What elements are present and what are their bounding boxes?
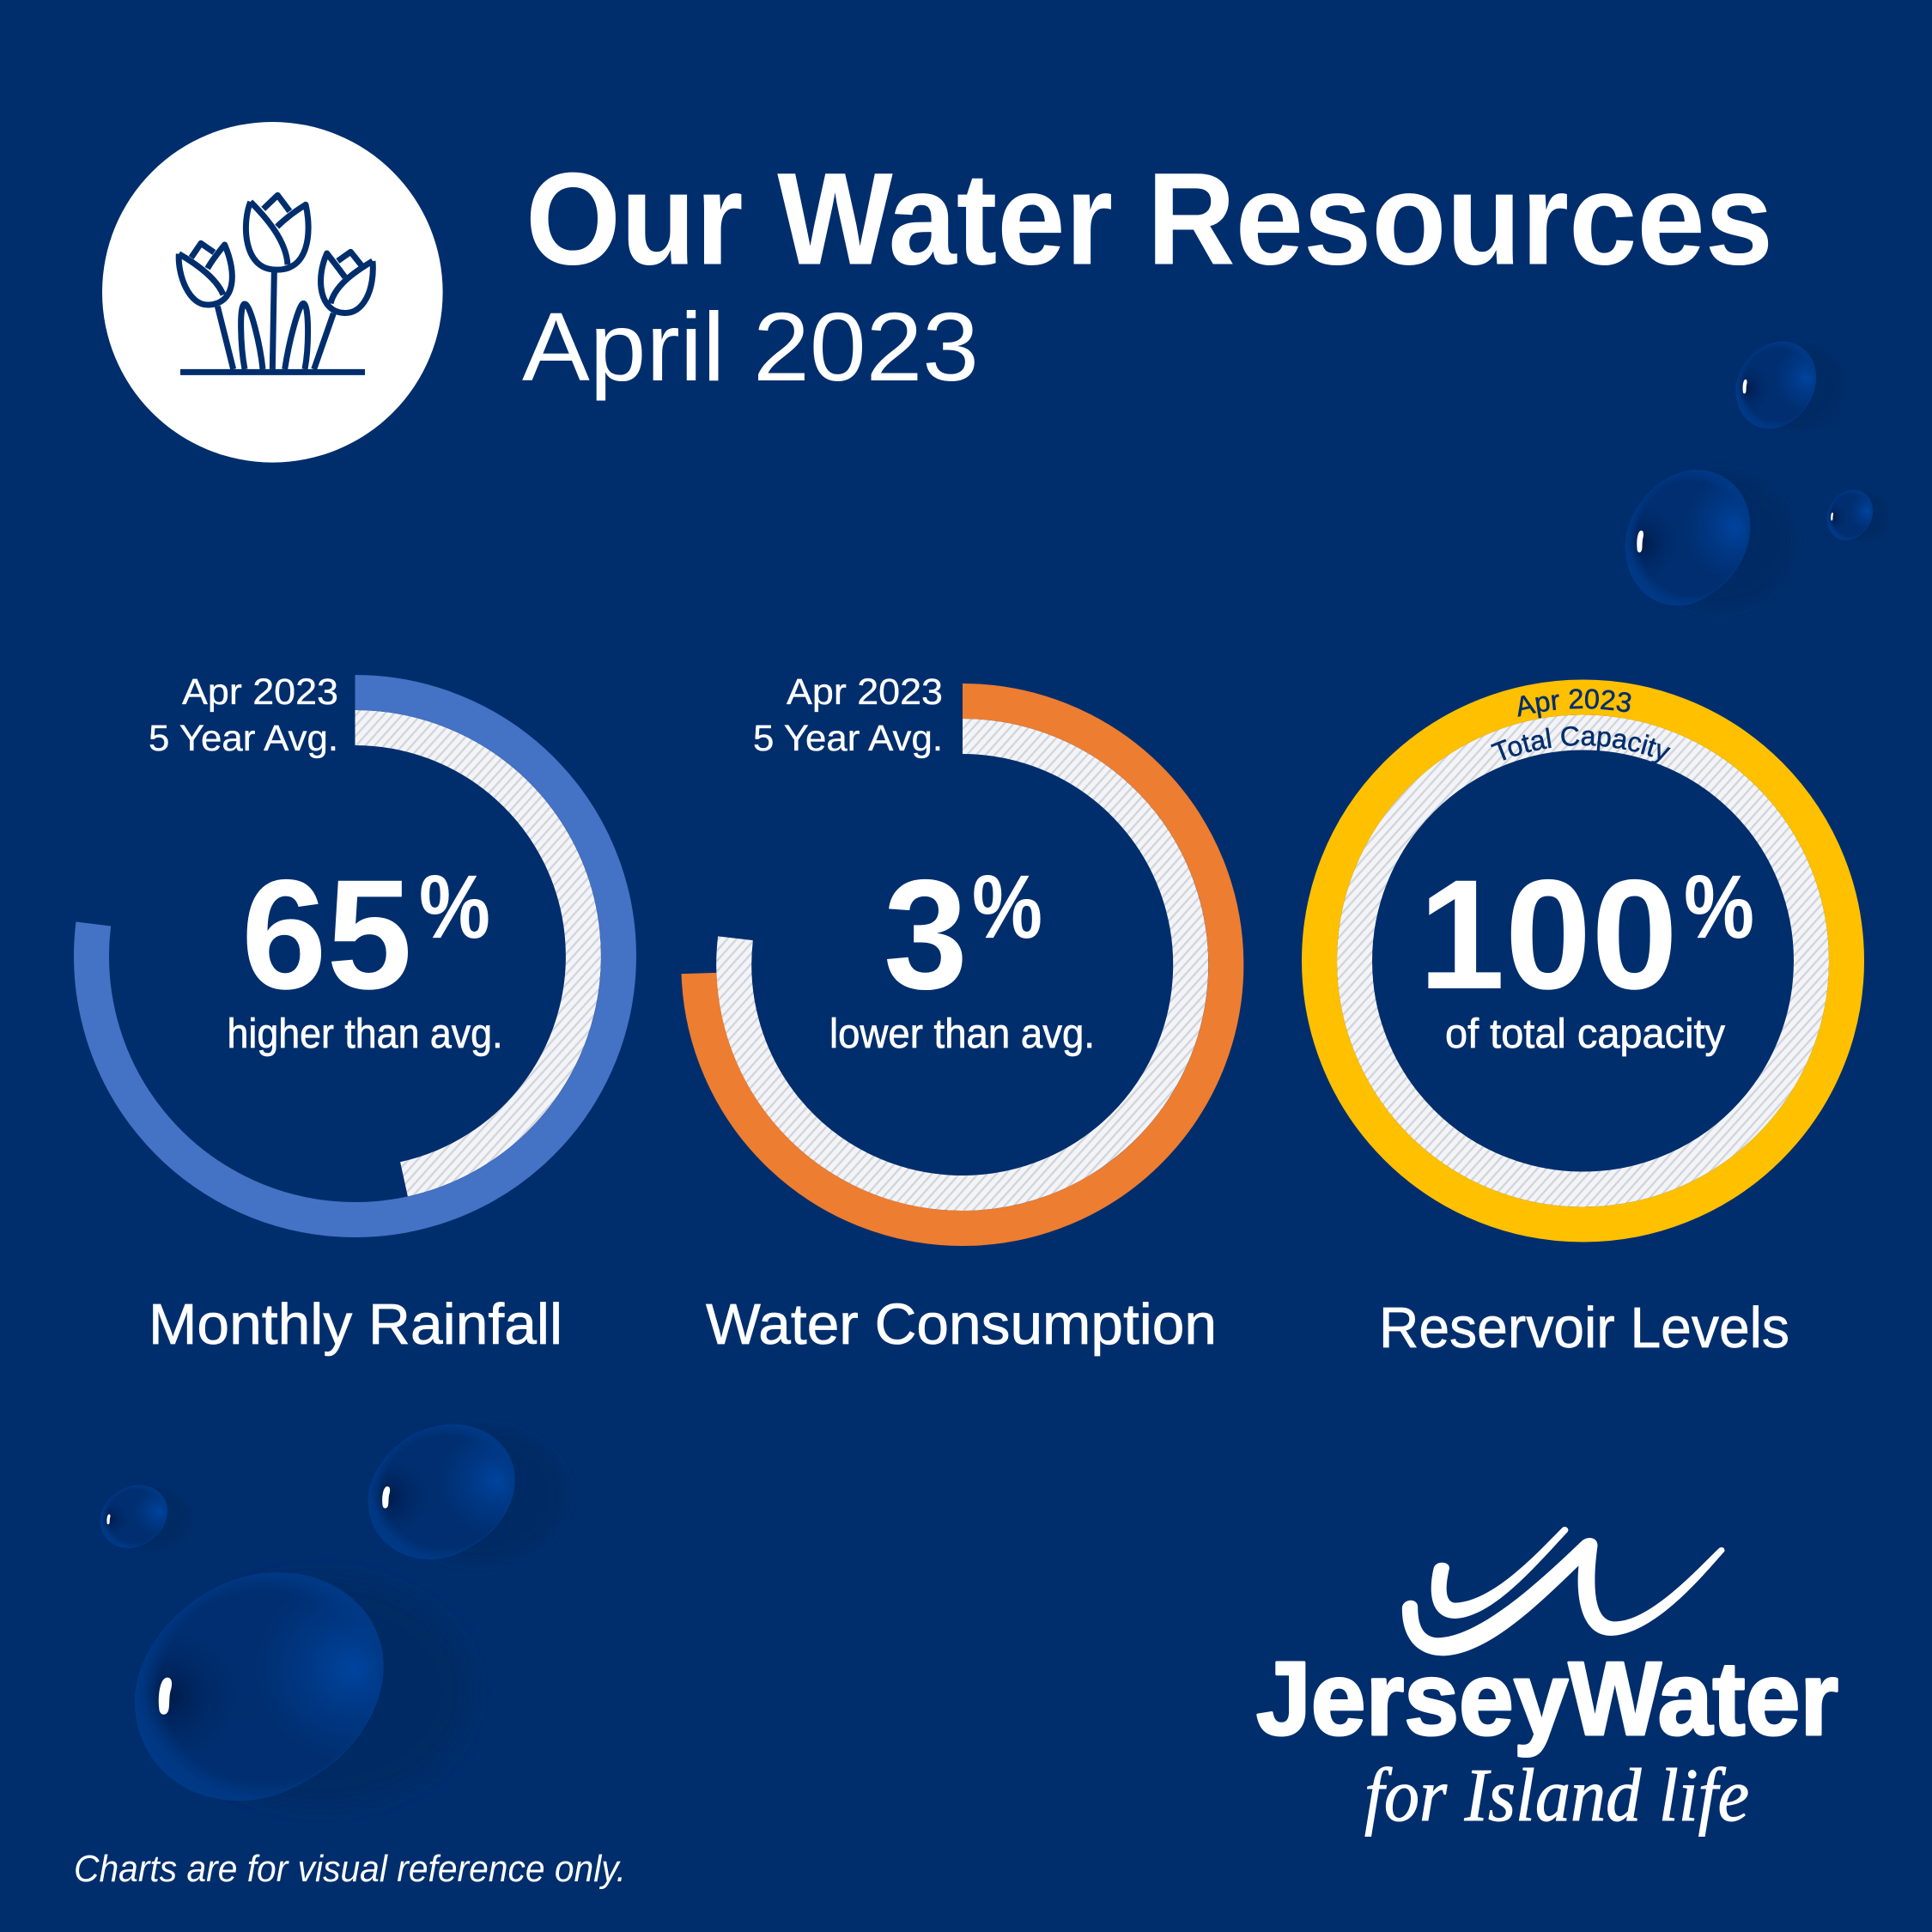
ring: consumption April 2023 [699,701,1226,1228]
heading: reservoir levels: Reservoir Levels [1379,1296,1789,1360]
value: 65 percent: 65 [241,847,412,1022]
heading: monthly rainfall: Monthly Rainfall [149,1292,562,1357]
curved label: Apr 2023: Apr 2023 [1518,689,1631,718]
droplet: top middle [1736,342,1844,430]
value: 100 percent: 100 [1419,847,1678,1022]
icon: tulips in white circle [102,122,443,463]
caption: lower than avg.: lower than avg. [829,1012,1095,1057]
droplet: top large [1625,471,1794,608]
ring: consumption 5 year average [734,737,1191,1194]
value: 100 percent: % [1684,857,1754,957]
ring: rainfall 5 year average [355,728,583,1179]
legend: consumption: Apr 2023 [787,671,943,713]
logo wordmark: JerseyWater [1256,1640,1838,1757]
value: 3 percent: % [972,857,1042,957]
logo waves [1402,1527,1724,1656]
ring: rainfall April 2023 [92,692,619,1219]
legend: consumption [753,671,943,759]
heading: water consumption: Water Consumption [706,1292,1217,1357]
value: 65 percent: % [419,857,490,957]
panel: reservoir levels [1302,680,1864,1360]
panel: monthly rainfall [92,671,619,1357]
title: Our Water Resources [526,146,1773,292]
footnote: Charts are for visual reference only. [74,1848,626,1890]
curved label: Total Capacity: Total Capacity [1491,726,1671,763]
droplet: bottom small [100,1485,191,1549]
ring: total capacity [1355,732,1812,1189]
subtitle: April 2023 [522,293,979,401]
droplet: bottom middle [368,1425,566,1562]
legend: rainfall [149,671,338,759]
legend: consumption: 5 Year Avg. [753,718,943,759]
panel: water consumption [699,671,1226,1357]
value: 65 percent [241,847,490,1022]
logo tagline: for Island life [1364,1754,1749,1838]
droplet: top small [1827,490,1889,541]
legend: rainfall: 5 Year Avg. [149,718,338,759]
logo: Jersey Water [1256,1527,1838,1838]
caption: higher than avg.: higher than avg. [227,1012,503,1057]
value: 3 percent [884,847,1042,1022]
ring: reservoir April 2023 [1319,697,1846,1224]
droplet: bottom large [135,1573,470,1805]
value: 3 percent: 3 [884,847,968,1022]
caption: of total capacity: of total capacity [1445,1012,1725,1057]
legend: rainfall: Apr 2023 [182,671,338,713]
